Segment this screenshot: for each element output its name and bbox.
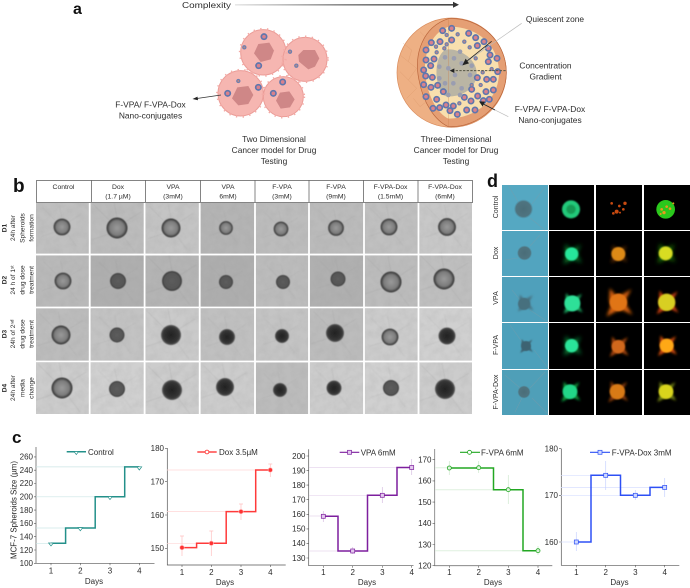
label: concentration gradient: Concentration bbox=[519, 60, 572, 70]
chart: F-VPA-Dox 3mM: 1 bbox=[574, 568, 579, 577]
chart: F-VPA-Dox 3mM: 170 bbox=[545, 491, 559, 500]
orange channel column bbox=[596, 185, 642, 415]
table header row: (3mM) bbox=[272, 194, 292, 200]
chart: F-VPA 6mM bbox=[418, 448, 552, 587]
caption: three dimensional model: Three-Dimensional bbox=[421, 134, 492, 144]
table header row: (9mM) bbox=[326, 194, 346, 200]
row labels: D1 bbox=[2, 223, 8, 232]
legend: F-VPA-Dox: F-VPA-Dox 3mM bbox=[612, 448, 672, 457]
chart: Control: 120 bbox=[20, 546, 34, 555]
chart: Control: 4 bbox=[137, 566, 142, 576]
chart: F-VPA-Dox 3mM: 160 bbox=[545, 538, 559, 547]
label: 2D nano-conjugates: Nano-conjugates bbox=[119, 110, 182, 120]
row labels: D4 bbox=[2, 383, 8, 392]
row labels: 24h of 2ⁿᵈ bbox=[10, 319, 17, 348]
caption: two dimensional model: Cancer model for Drug bbox=[232, 145, 317, 155]
row labels: VPA bbox=[493, 291, 500, 305]
merged channel column bbox=[644, 185, 690, 415]
caption: three dimensional model: Cancer model for Drug bbox=[414, 145, 499, 155]
chart: Control bbox=[20, 447, 154, 586]
complexity arrow with label bbox=[182, 0, 459, 10]
chart: Dox 3.5µM bbox=[151, 444, 286, 587]
table header row: (1.7 µM) bbox=[105, 194, 131, 200]
chart: Dox 3.5µM: 180 bbox=[151, 444, 165, 453]
chart: VPA 6mM: 1 bbox=[321, 568, 326, 577]
chart: Dox 3.5µM: 4 bbox=[268, 568, 273, 577]
row labels: D3 bbox=[2, 329, 8, 338]
chart: VPA 6mM: 130 bbox=[292, 554, 306, 563]
chart: F-VPA-Dox 3mM: 2 bbox=[603, 568, 608, 577]
chart: F-VPA 6mM: Days bbox=[484, 578, 502, 587]
chart: Dox 3.5µM: 150 bbox=[151, 544, 165, 553]
caption: two dimensional model: Testing bbox=[261, 156, 288, 166]
chart: VPA 6mM: 170 bbox=[292, 496, 306, 504]
y axis title: MCF-7 Spheroids Size (µm) bbox=[10, 461, 18, 559]
table header row: (6mM) bbox=[435, 194, 455, 200]
table header row: (1.5mM) bbox=[378, 194, 403, 200]
table header row: F-VPA-Dox bbox=[428, 184, 463, 191]
row labels: treatment bbox=[28, 320, 36, 348]
panel a: cancer model schematic bbox=[73, 0, 586, 166]
caption: three dimensional model: Testing bbox=[443, 156, 470, 166]
panel b: bright-field spheroid image grid bbox=[2, 176, 472, 414]
chart: F-VPA 6mM: 170 bbox=[418, 456, 432, 464]
chart: Dox 3.5µM: 1 bbox=[180, 568, 185, 577]
chart: F-VPA-Dox 3mM: 3 bbox=[633, 568, 638, 577]
table header row: Dox bbox=[112, 184, 125, 191]
label: 2D nano-conjugates: F-VPA/ F-VPA-Dox bbox=[115, 100, 187, 110]
chart: Control: 140 bbox=[20, 532, 34, 542]
row labels: drug dose bbox=[20, 319, 26, 349]
chart: VPA 6mM: 3 bbox=[380, 568, 385, 577]
table header row: F-VPA-Dox bbox=[374, 184, 408, 191]
row labels: change bbox=[28, 377, 36, 399]
panel label d: d bbox=[487, 171, 498, 191]
chart: F-VPA 6mM: 160 bbox=[418, 477, 432, 486]
legend: VPA: VPA 6mM bbox=[361, 448, 396, 457]
arrow to nano-conjugate bbox=[192, 95, 221, 100]
chart: VPA 6mM: 190 bbox=[292, 466, 306, 475]
row labels: 24h after bbox=[10, 374, 17, 401]
panel d: fluorescence image grid bbox=[487, 171, 690, 415]
chart: Dox 3.5µM: 2 bbox=[209, 568, 214, 577]
legend: Dox bbox=[197, 448, 258, 457]
panel c: step charts bbox=[10, 428, 679, 587]
row labels: F-VPA bbox=[493, 335, 500, 355]
chart: F-VPA 6mM: 150 bbox=[418, 498, 432, 507]
chart: F-VPA-Dox 3mM: Days bbox=[610, 578, 629, 587]
chart: Control: Days bbox=[85, 577, 103, 586]
chart: F-VPA-Dox 3mM: 4 bbox=[662, 568, 667, 577]
chart: VPA 6mM bbox=[292, 448, 414, 587]
chart: Control: 200 bbox=[20, 492, 34, 502]
table header row: 6mM) bbox=[219, 194, 237, 200]
table header row: F-VPA bbox=[272, 184, 292, 191]
chart: VPA 6mM: 150 bbox=[292, 525, 306, 534]
row labels bbox=[2, 212, 36, 401]
row labels: Control bbox=[493, 195, 500, 218]
chart: F-VPA 6mM: 4 bbox=[536, 568, 541, 577]
table header row: VPA bbox=[166, 184, 180, 191]
chart: VPA 6mM: Days bbox=[358, 578, 376, 587]
panel label b: b bbox=[13, 176, 25, 197]
row D2 spheroids bbox=[54, 268, 456, 294]
label: 3D nano-conjugates: F-VPA/ F-VPA-Dox bbox=[515, 104, 586, 114]
row labels: drug dose bbox=[20, 265, 26, 295]
two dimensional cell cluster bbox=[217, 29, 328, 117]
chart: Control: 240 bbox=[20, 466, 34, 475]
green channel column bbox=[549, 185, 594, 415]
panel label a: a bbox=[73, 1, 82, 18]
chart: F-VPA-Dox 3mM: 180 bbox=[545, 444, 559, 454]
row labels: treatment bbox=[28, 266, 36, 294]
legend: F-VPA: F-VPA 6mM bbox=[481, 448, 524, 457]
label: 3D nano-conjugates: Nano-conjugates bbox=[518, 115, 582, 125]
row D1 spheroids bbox=[53, 216, 456, 240]
row labels: D2 bbox=[2, 275, 8, 284]
chart: F-VPA 6mM: 140 bbox=[418, 519, 432, 528]
chart: Dox 3.5µM: Days bbox=[216, 578, 234, 587]
table header row: VPA bbox=[221, 184, 235, 191]
chart: Control: 100 bbox=[20, 559, 34, 568]
label: quiescent zone: Quiescent zone bbox=[526, 14, 584, 24]
row labels: Dox bbox=[493, 246, 500, 259]
chart: Control: 260 bbox=[20, 453, 34, 462]
row labels: formation bbox=[28, 214, 36, 242]
chart: Control: 220 bbox=[20, 479, 34, 488]
chart: Control: 160 bbox=[20, 519, 34, 528]
chart: Control: 180 bbox=[20, 506, 34, 515]
microscopy image grid bbox=[36, 202, 472, 414]
complexity arrow with label: Complexity bbox=[182, 0, 232, 10]
chart: F-VPA 6mM: 130 bbox=[418, 540, 432, 549]
chart: Control: 3 bbox=[108, 566, 113, 576]
row labels: media bbox=[20, 379, 26, 397]
three dimensional spheroid bbox=[397, 18, 522, 127]
row labels bbox=[493, 195, 500, 409]
chart: Control: 2 bbox=[78, 566, 83, 576]
chart: VPA 6mM: 4 bbox=[409, 568, 414, 577]
row labels: F-VPA-Dox bbox=[493, 374, 500, 409]
chart: F-VPA 6mM: 2 bbox=[476, 568, 481, 577]
legend: Control: Control bbox=[88, 448, 114, 457]
chart: Dox 3.5µM: 160 bbox=[151, 511, 165, 520]
label: concentration gradient: Gradient bbox=[529, 72, 562, 82]
chart: Dox 3.5µM: 170 bbox=[151, 477, 165, 486]
row labels: Spheroids bbox=[20, 212, 26, 243]
chart: F-VPA 6mM: 3 bbox=[506, 568, 511, 577]
row D4 spheroids bbox=[50, 376, 456, 401]
chart: VPA 6mM: 180 bbox=[292, 481, 306, 490]
chart: VPA 6mM: 200 bbox=[292, 452, 306, 461]
chart: Control: 1 bbox=[49, 566, 54, 576]
bright-field column bbox=[502, 185, 548, 415]
row labels: 24h after bbox=[10, 214, 17, 241]
chart: Dox 3.5µM: 3 bbox=[239, 568, 244, 577]
table header row bbox=[36, 180, 472, 202]
table header row: F-VPA bbox=[326, 184, 346, 191]
chart: F-VPA 6mM: 1 bbox=[447, 568, 452, 577]
caption: two dimensional model: Two Dimensional bbox=[242, 134, 306, 144]
table header row: (3mM) bbox=[163, 194, 183, 200]
table header row: Control bbox=[53, 184, 75, 191]
chart: F-VPA-Dox 3mM bbox=[545, 444, 679, 587]
chart: VPA 6mM: 160 bbox=[292, 510, 306, 519]
chart: VPA 6mM: 2 bbox=[350, 568, 355, 577]
panel label c: c bbox=[12, 428, 21, 447]
chart: F-VPA 6mM: 120 bbox=[418, 562, 432, 570]
chart: VPA 6mM: 140 bbox=[292, 539, 306, 548]
row labels: 24 h of 1ˢᵗ bbox=[10, 265, 17, 295]
legend: Dox: Dox 3.5µM bbox=[219, 448, 258, 457]
row D3 spheroids bbox=[51, 323, 456, 346]
